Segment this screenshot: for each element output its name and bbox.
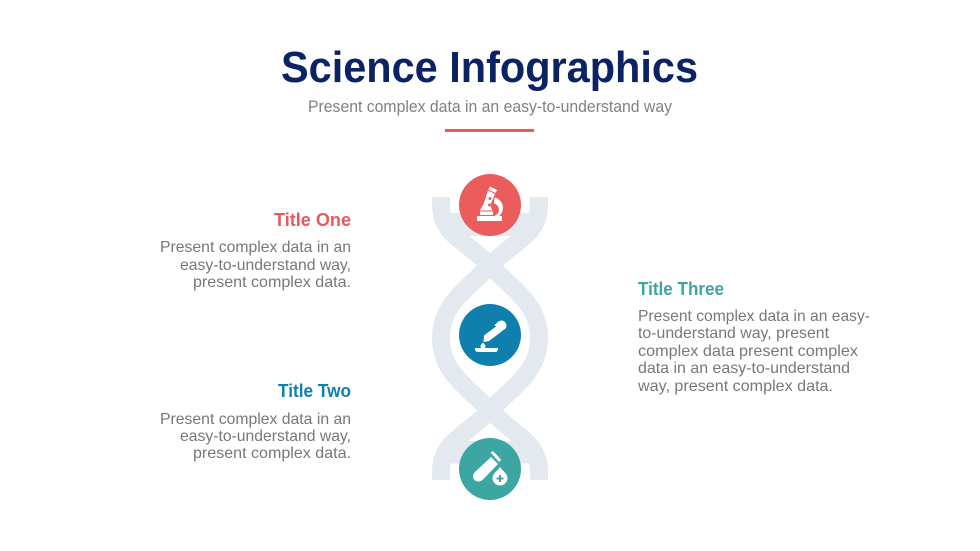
body: title three: complex data present complex — [638, 343, 858, 360]
body: title three — [637, 308, 870, 395]
body: title two: present complex data. — [193, 445, 351, 462]
text block: title two — [160, 381, 351, 462]
heading: title two: Title Two — [278, 381, 351, 401]
body: title three: to-understand way, present — [638, 325, 830, 342]
body: title one: easy-to-understand way, — [180, 257, 351, 274]
subtitle: Present complex data in an easy-to-understand way — [308, 98, 673, 116]
dna helix — [441, 197, 539, 480]
body: title three: way, present complex data. — [637, 378, 833, 395]
title underline — [445, 129, 534, 132]
title: Science Infographics — [281, 43, 698, 92]
text block: title three — [637, 279, 870, 395]
body: title three: data in an easy-to-understand — [638, 360, 850, 377]
body: title two — [160, 411, 351, 462]
heading: title three: Title Three — [638, 279, 724, 299]
body: title one — [160, 239, 351, 291]
body: title two: Present complex data in an — [160, 411, 351, 428]
heading: title one: Title One — [274, 210, 351, 230]
text block: title one — [160, 210, 351, 291]
body: title one: Present complex data in an — [160, 239, 351, 256]
icon: test tube and drop — [459, 438, 521, 500]
body: title two: easy-to-understand way, — [180, 428, 351, 445]
body: title one: present complex data. — [193, 274, 351, 291]
body: title three: Present complex data in an easy- — [638, 308, 870, 325]
icon: microscope — [459, 174, 521, 236]
icon: pipette — [459, 304, 521, 366]
